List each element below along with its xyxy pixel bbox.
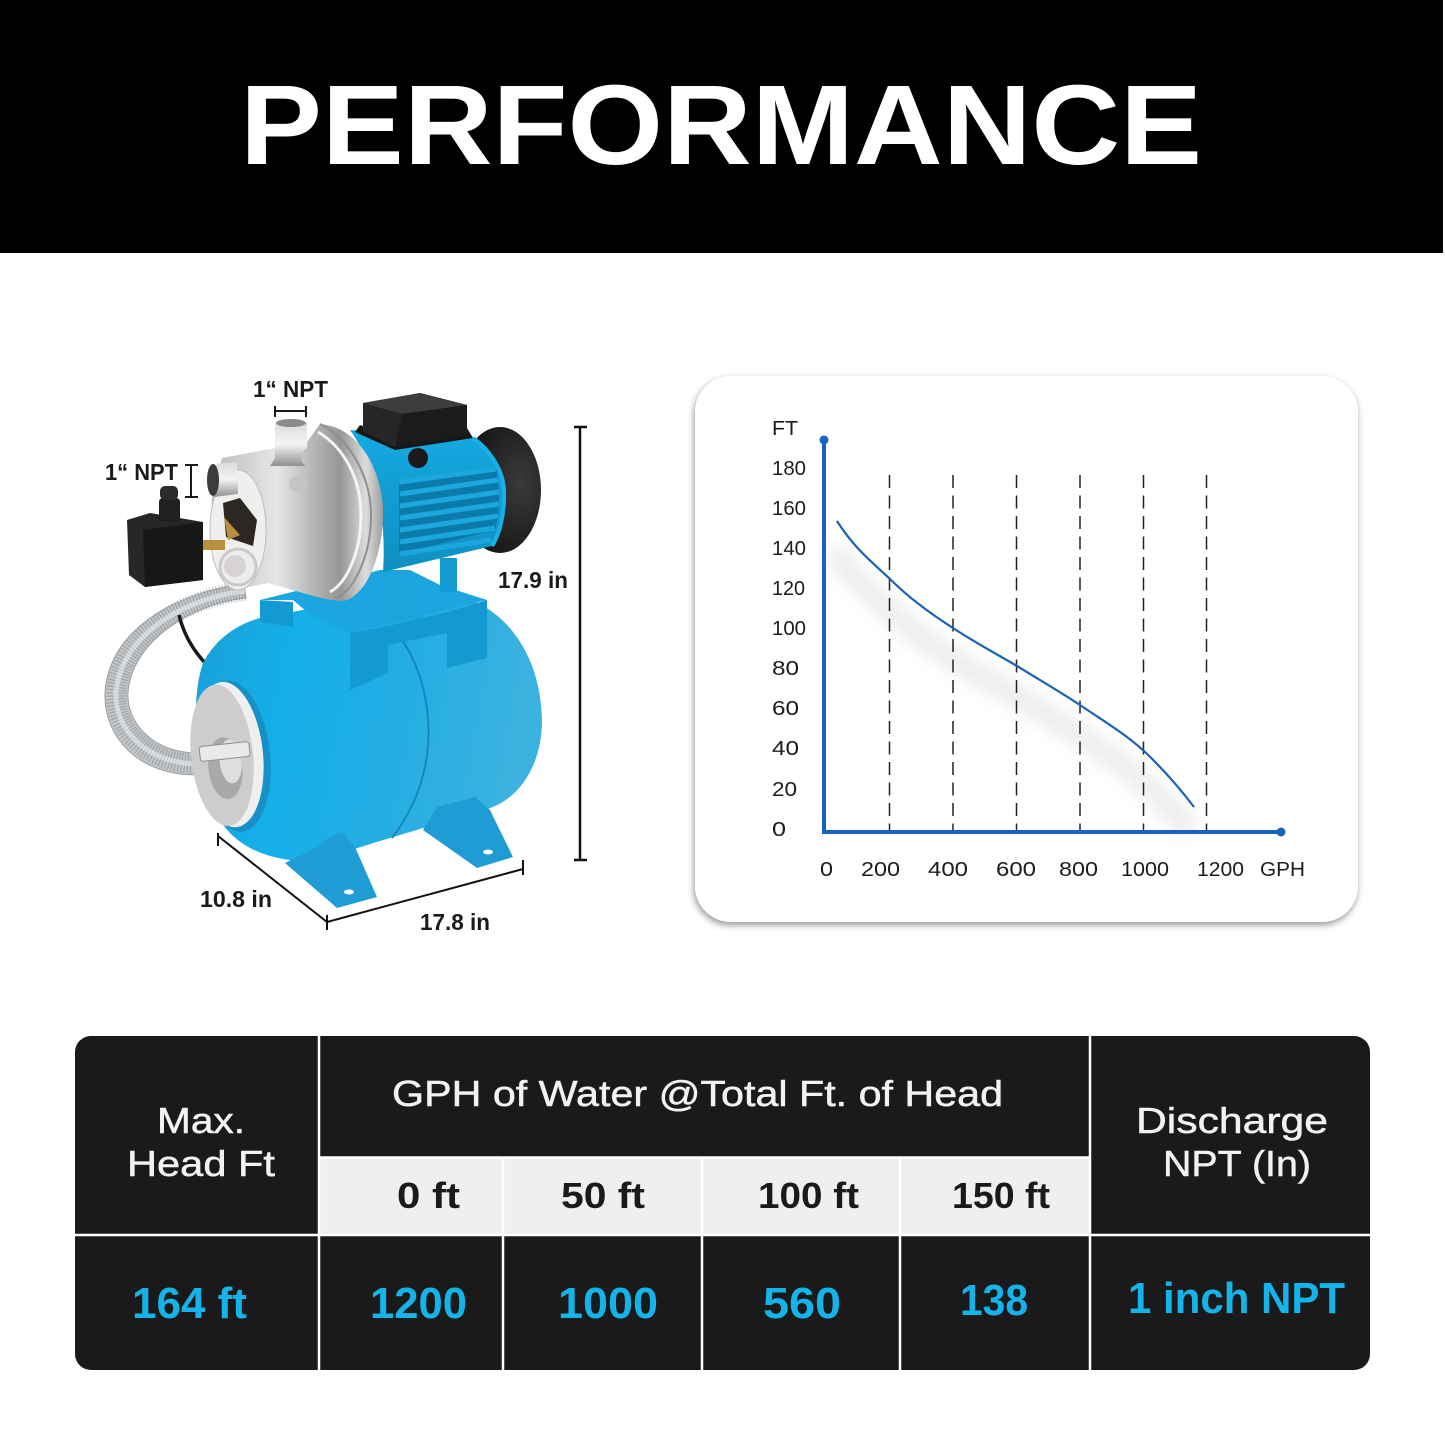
y axis labels: 0 bbox=[772, 819, 786, 841]
chart card bbox=[695, 376, 1358, 922]
y axis labels: 60 bbox=[772, 698, 799, 720]
data values: 138 bbox=[960, 1276, 1028, 1325]
specification table bbox=[75, 1036, 1370, 1370]
curve shadow bbox=[834, 550, 1191, 830]
head sub-headers: 150 ft bbox=[952, 1175, 1050, 1216]
x axis labels: 600 bbox=[996, 859, 1036, 881]
dimension: top outlet bbox=[253, 376, 328, 417]
dimension: side inlet: 1“ NPT bbox=[105, 459, 178, 485]
y axis labels: 20 bbox=[772, 779, 797, 801]
stainless pump housing bbox=[207, 419, 383, 601]
data values: 1200 bbox=[370, 1279, 467, 1328]
grid lines bbox=[890, 475, 1206, 830]
pump curve bbox=[837, 521, 1194, 807]
y axis labels: 140 bbox=[772, 538, 806, 560]
head sub-headers: 0 ft bbox=[397, 1175, 460, 1216]
data values: 1000 bbox=[558, 1279, 658, 1328]
dimension: length: 17.8 in bbox=[420, 909, 490, 935]
header: max head: Max. bbox=[157, 1100, 245, 1141]
tank feet bbox=[285, 797, 513, 908]
y axis labels: 180 bbox=[772, 458, 806, 480]
header: discharge: NPT (In) bbox=[1163, 1143, 1311, 1184]
table background bbox=[75, 1036, 1370, 1370]
x axis labels: 400 bbox=[928, 859, 968, 881]
pressure gauge bbox=[220, 549, 256, 585]
header: flow: GPH of Water @Total Ft. of Head bbox=[392, 1073, 1003, 1114]
data values: 560 bbox=[763, 1279, 841, 1328]
axes bbox=[820, 436, 1286, 836]
x axis labels: 800 bbox=[1059, 859, 1098, 881]
title banner: PERFORMANCE bbox=[240, 62, 1202, 188]
x axis labels: 0 bbox=[820, 859, 833, 881]
header: max head: Head Ft bbox=[127, 1143, 275, 1184]
x axis labels: 1000 bbox=[1121, 859, 1169, 881]
power cable bbox=[179, 615, 206, 664]
y axis labels: 100 bbox=[772, 618, 806, 640]
dimension: length bbox=[327, 860, 523, 935]
y axis labels: FT bbox=[772, 418, 798, 440]
junction box bbox=[355, 393, 473, 468]
tank seam bbox=[392, 640, 429, 838]
flow sub-header row background bbox=[320, 1158, 1089, 1234]
y axis labels: 160 bbox=[772, 498, 806, 520]
pressure tank bbox=[196, 590, 542, 860]
data values: 1 inch NPT bbox=[1128, 1274, 1345, 1323]
header: max head bbox=[127, 1100, 275, 1184]
dimension: side inlet bbox=[105, 459, 198, 497]
flexible hose bbox=[105, 584, 246, 775]
y axis labels bbox=[772, 418, 806, 841]
dimension: top outlet: 1“ NPT bbox=[253, 376, 328, 402]
header: discharge bbox=[1136, 1100, 1328, 1184]
head sub-headers: 50 ft bbox=[561, 1175, 645, 1216]
dimension: depth bbox=[200, 833, 327, 930]
panel: performance curve chart bbox=[695, 376, 1358, 922]
motor body with fins bbox=[350, 430, 504, 572]
x axis labels: GPH bbox=[1260, 859, 1305, 881]
x axis labels: 1200 bbox=[1197, 859, 1244, 881]
y axis labels: 80 bbox=[772, 658, 799, 680]
table dividers bbox=[75, 1036, 1370, 1370]
y axis labels: 120 bbox=[772, 578, 805, 600]
motor end cap bbox=[459, 427, 541, 553]
x axis labels bbox=[820, 859, 1305, 881]
x axis labels: 200 bbox=[861, 859, 900, 881]
brass fitting bbox=[203, 540, 225, 550]
y axis labels: 40 bbox=[772, 738, 799, 760]
data values bbox=[132, 1274, 1345, 1328]
header: discharge: Discharge bbox=[1136, 1100, 1328, 1141]
head sub-headers: 100 ft bbox=[758, 1175, 859, 1216]
tank end flange bbox=[183, 677, 278, 836]
title banner bbox=[0, 0, 1443, 253]
dimension: height: 17.9 in bbox=[498, 567, 568, 593]
head sub-headers bbox=[397, 1175, 1050, 1216]
pressure switch bbox=[127, 486, 203, 587]
data values: 164 ft bbox=[132, 1279, 247, 1328]
pump product illustration bbox=[105, 376, 587, 935]
mounting bracket bbox=[260, 558, 487, 690]
dimension: height bbox=[498, 426, 587, 860]
dimension: depth: 10.8 in bbox=[200, 886, 272, 912]
